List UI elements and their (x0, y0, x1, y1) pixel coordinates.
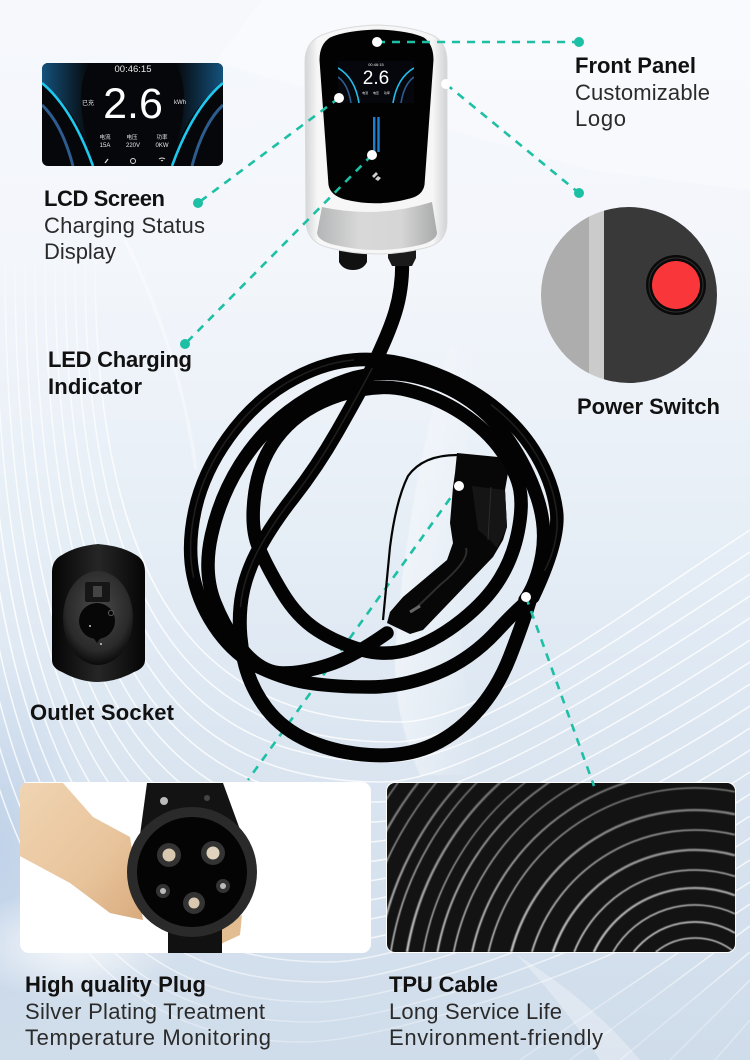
cable gland right (388, 250, 416, 266)
label: TPU cable (389, 972, 603, 1050)
label: LED charging indicator: Indicator (48, 374, 142, 399)
dashed leader: power switch (446, 84, 579, 193)
cable gland left (339, 250, 367, 270)
label: TPU cable: Environment-friendly (389, 1025, 603, 1050)
dashed leader: front panel (377, 41, 579, 43)
label: front panel (575, 53, 710, 131)
dashed leader: LED indicator (185, 155, 372, 344)
label: TPU cable: TPU Cable (389, 972, 498, 997)
photo: high quality plug (18, 782, 371, 953)
mini screen: 00:46:15 (368, 62, 385, 67)
mini screen: 电流 电压 功率 (362, 90, 390, 95)
mini screen: 2.6 (363, 68, 389, 89)
label: LCD screen: LCD Screen (44, 186, 165, 211)
label: high quality plug (25, 972, 271, 1050)
label: front panel: Customizable (575, 80, 710, 105)
LCD screen enlarged: 电流 (99, 133, 111, 141)
charging pins (156, 841, 230, 914)
dashed leader: TPU cable (526, 597, 594, 786)
label: LCD screen: Charging Status (44, 213, 205, 238)
LCD screen enlarged: 15A (100, 143, 110, 149)
LCD screen enlarged: 00:46:15 (115, 64, 151, 75)
label: outlet socket: Outlet Socket (30, 700, 175, 725)
leader end dots (180, 37, 584, 602)
label: front panel: Front Panel (575, 53, 696, 78)
label: LCD screen (44, 186, 205, 264)
label: high quality plug: Silver Plating Treatment (25, 999, 265, 1024)
outlet socket (52, 544, 145, 682)
label: LED charging indicator: LED Charging (48, 347, 192, 372)
label: TPU cable: Long Service Life (389, 999, 562, 1024)
label: LED charging indicator (48, 347, 192, 399)
LCD screen enlarged: kWh (174, 100, 186, 106)
dashed leader: LCD screen (198, 98, 339, 203)
LCD screen enlarged: 功率 (156, 133, 168, 141)
label: high quality plug: Temperature Monitoring (25, 1025, 271, 1050)
charging plug (383, 453, 508, 634)
dashed leader: plug (248, 486, 459, 780)
wallbox charger (305, 25, 447, 270)
label: high quality plug: High quality Plug (25, 972, 206, 997)
label: LCD screen: Display (44, 239, 116, 264)
LCD screen enlarged (42, 63, 223, 166)
charging cable coil (191, 255, 557, 755)
label: front panel: Logo (575, 106, 626, 131)
LCD screen enlarged: 电压 (126, 133, 138, 141)
label: power switch: Power Switch (577, 394, 720, 419)
LCD screen enlarged: 已充 (82, 99, 94, 107)
mini screen (338, 61, 414, 103)
LCD screen enlarged: 220V (126, 143, 140, 149)
LCD screen enlarged: 0KW (155, 143, 169, 149)
LCD screen enlarged: 2.6 (103, 80, 163, 128)
power switch enlarged (540, 205, 719, 385)
photo: TPU cable close-up (386, 782, 736, 953)
